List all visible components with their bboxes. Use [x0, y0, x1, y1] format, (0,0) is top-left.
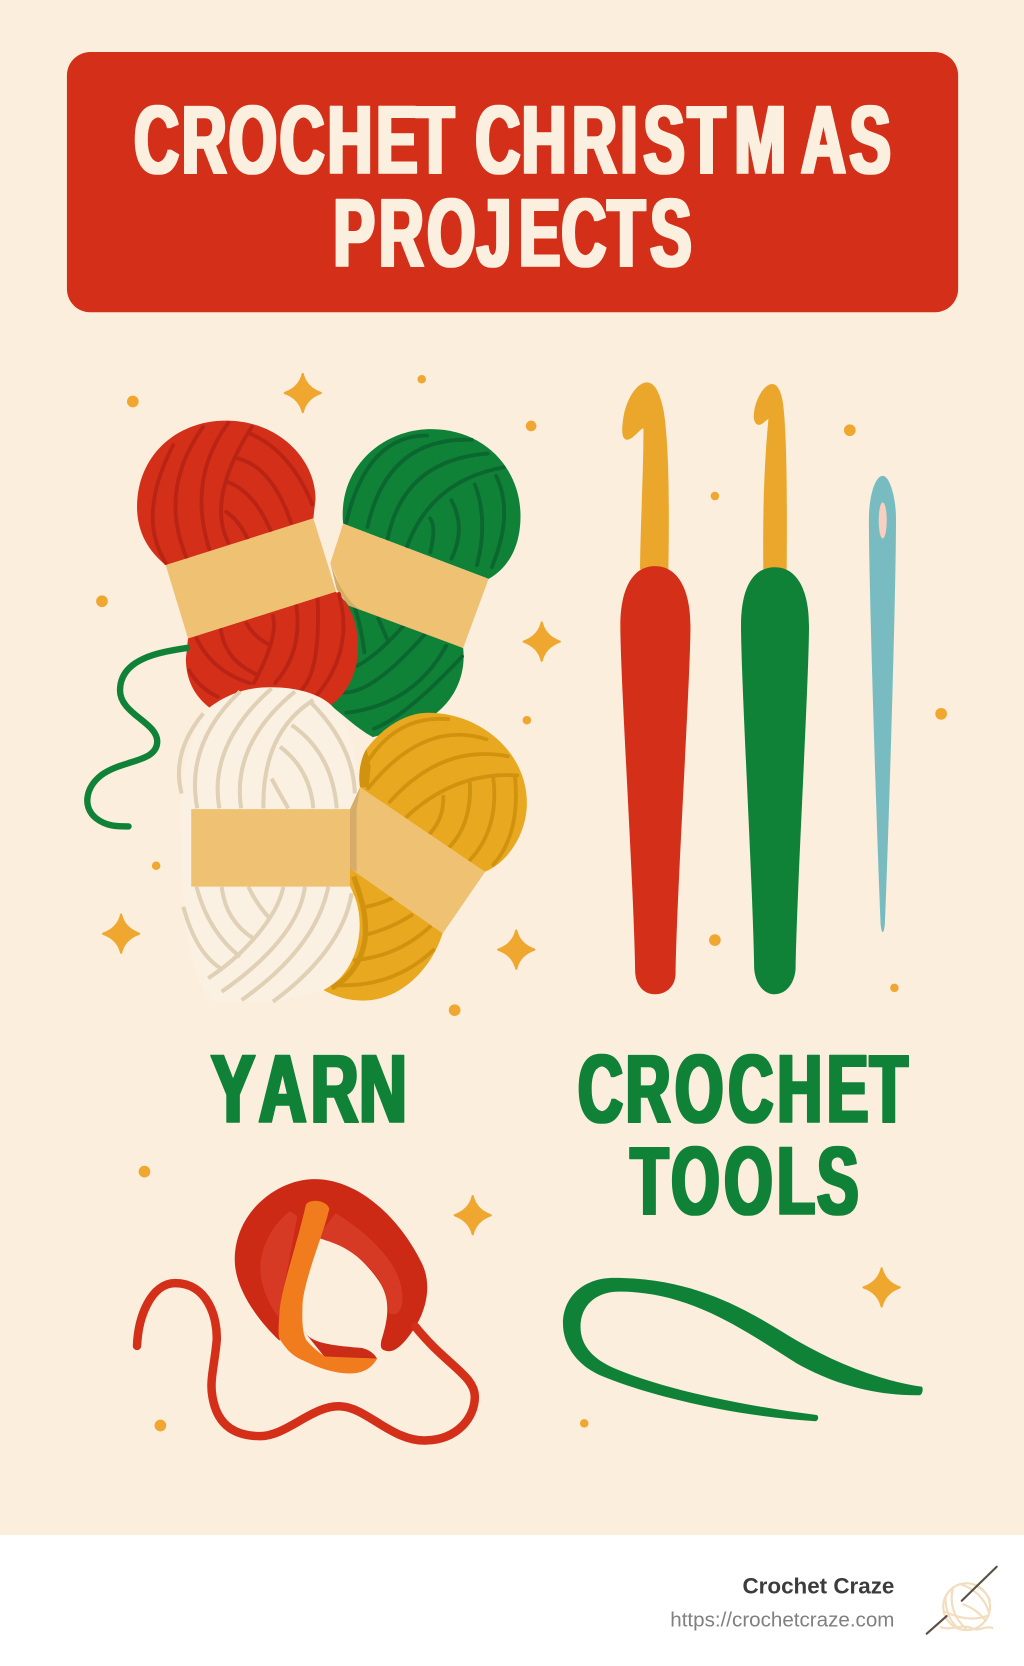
crochet hook: red: [620, 382, 690, 994]
section label: crochet tools: CROCHET: [578, 1036, 908, 1144]
green yarn ball: [330, 429, 520, 737]
confetti dots: [96, 375, 947, 1431]
yarn balls group: [87, 421, 527, 1002]
title text: CROCHET CHRISTMAS: [134, 87, 891, 195]
title banner: [67, 52, 958, 312]
yarn labels (bands): [191, 787, 485, 933]
section label: yarn: YARN: [211, 1035, 407, 1143]
crochet hook: green: [741, 384, 809, 994]
red yarn strand: [137, 1283, 475, 1440]
title text: [134, 87, 891, 288]
yellow yarn ball: [323, 713, 527, 1001]
yarn needle: [869, 476, 896, 932]
red yarn ball: [137, 421, 358, 707]
section label: crochet tools: [578, 1036, 908, 1236]
sparkles: [103, 374, 900, 1307]
brand name: Crochet Craze: [743, 1573, 894, 1598]
green yarn loop: [563, 1278, 923, 1421]
section label: crochet tools: TOOLS: [631, 1128, 858, 1236]
cream yarn ball: [179, 687, 360, 1002]
green yarn tail: [87, 648, 187, 826]
footer: [0, 1535, 1024, 1666]
partial red yarn skein: [235, 1179, 427, 1373]
website url: https://crochetcraze.com: [670, 1609, 894, 1631]
title text: PROJECTS: [333, 180, 692, 288]
logo: yarn ball and hook: [927, 1567, 997, 1634]
